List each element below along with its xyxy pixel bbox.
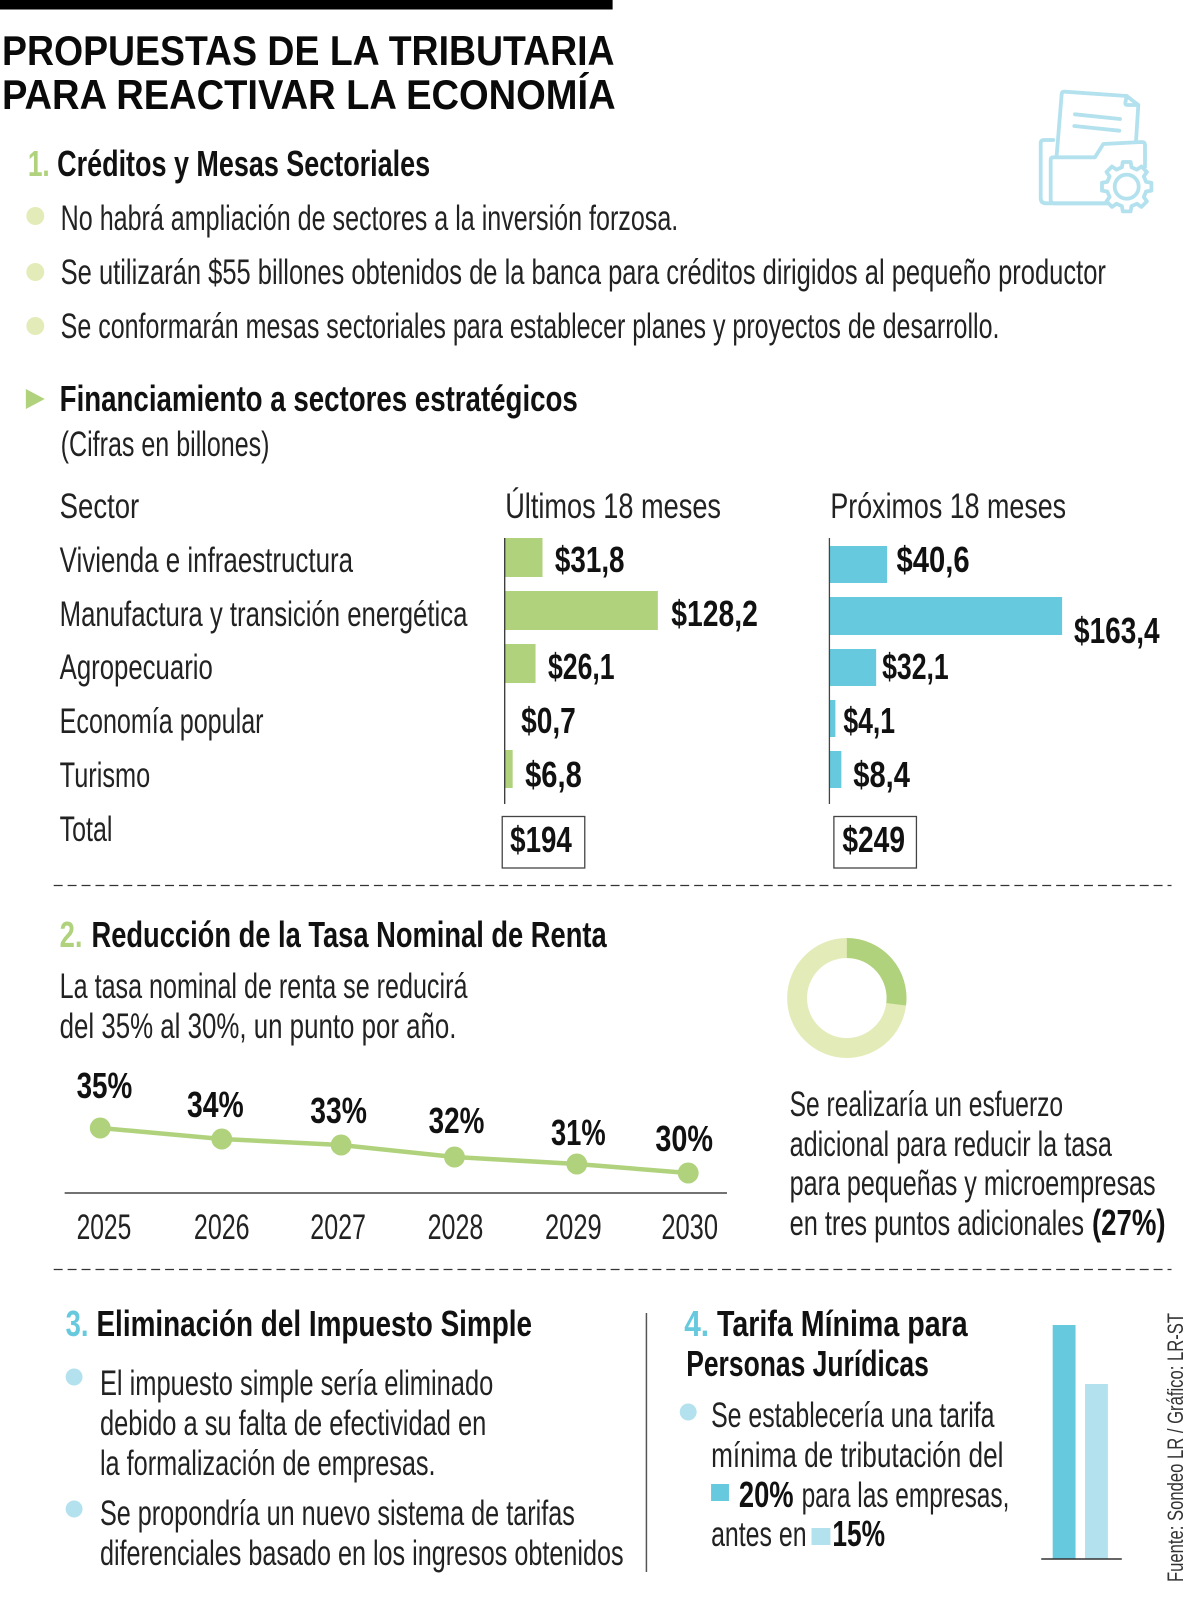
total box: próximos bbox=[834, 816, 916, 868]
values: próximos 18 meses: $32,1 bbox=[882, 647, 949, 687]
bullet text: section 4 bbox=[680, 1396, 1009, 1554]
total box: próximos: $249 bbox=[842, 820, 905, 860]
heading: section 3: Eliminación del Impuesto Simple bbox=[96, 1304, 532, 1344]
values: próximos 18 meses: $8,4 bbox=[853, 755, 910, 795]
title: PARA REACTIVAR LA ECONOMÍA bbox=[2, 71, 616, 118]
bar chart: strategic sector financing bbox=[60, 487, 1160, 868]
bullet list: section 3 bbox=[66, 1364, 624, 1573]
line chart: nominal rate 2025-2030: 32% bbox=[429, 1101, 484, 1141]
total box: últimos bbox=[502, 816, 585, 868]
values: próximos 18 meses: $163,4 bbox=[1074, 611, 1160, 651]
values: últimos 18 meses: $128,2 bbox=[671, 594, 758, 634]
total box: últimos: $194 bbox=[510, 820, 572, 860]
heading: section 4: 4. bbox=[684, 1304, 709, 1344]
line chart: nominal rate 2025-2030: 2026 bbox=[194, 1208, 250, 1247]
heading: section 4: Personas Jurídicas bbox=[686, 1344, 929, 1384]
heading: section 2: 2. bbox=[60, 915, 83, 955]
bullet list: section 3: diferenciales basado en los ingresos obtenidos bbox=[100, 1534, 624, 1573]
table headers: Próximos 18 meses bbox=[830, 487, 1066, 526]
bullet text: section 4: 20% bbox=[739, 1475, 794, 1515]
heading: section 4 bbox=[684, 1304, 968, 1384]
values: últimos 18 meses: $31,8 bbox=[555, 540, 625, 580]
sector labels: Total bbox=[60, 810, 112, 849]
line chart: nominal rate 2025-2030: 31% bbox=[551, 1113, 606, 1153]
table headers bbox=[60, 487, 1066, 526]
sector labels bbox=[60, 541, 468, 849]
series: próximos 18 meses bars bbox=[829, 538, 1062, 804]
heading: section 1: Créditos y Mesas Sectoriales bbox=[57, 144, 430, 184]
subheading: financing: (Cifras en billones) bbox=[61, 425, 270, 464]
bullet text: section 4: 15% bbox=[832, 1514, 885, 1554]
icon: section arrow bbox=[26, 389, 45, 409]
icon: folder with document and gear bbox=[1041, 92, 1151, 211]
bullet list: section 3: El impuesto simple sería eliminado bbox=[100, 1364, 493, 1403]
sector labels: Economía popular bbox=[60, 702, 264, 741]
text block: section 2 description: del 35% al 30%, un punto por año. bbox=[60, 1007, 456, 1046]
heading: section 1: 1. bbox=[28, 144, 50, 184]
text block: small business rate: en tres puntos adicionales bbox=[790, 1204, 1084, 1243]
values: últimos 18 meses: $6,8 bbox=[525, 755, 582, 795]
donut chart: 27% bbox=[797, 938, 906, 1048]
series: últimos 18 meses bars bbox=[505, 538, 658, 804]
source note: Fuente: Sondeo LR / Gráfico: LR-ST bbox=[1163, 1313, 1188, 1582]
line chart: nominal rate 2025-2030: 34% bbox=[187, 1085, 244, 1125]
values: próximos 18 meses: $4,1 bbox=[843, 701, 895, 741]
bar chart: minimum rate 20% vs 15% bbox=[1041, 1325, 1122, 1559]
line chart: nominal rate 2025-2030: 2029 bbox=[545, 1208, 602, 1247]
line chart: nominal rate 2025-2030: 2028 bbox=[428, 1208, 483, 1247]
subheading: financing bbox=[60, 379, 578, 464]
bullet list: section 1 bbox=[26, 199, 1106, 346]
line chart: nominal rate 2025-2030: 2030 bbox=[661, 1208, 718, 1247]
values: últimos 18 meses: $0,7 bbox=[521, 701, 576, 741]
line chart: nominal rate 2025-2030: 2027 bbox=[310, 1208, 366, 1247]
title bbox=[2, 27, 616, 118]
text block: section 2 description: La tasa nominal de renta se reducirá bbox=[60, 967, 468, 1006]
title: PROPUESTAS DE LA TRIBUTARIA bbox=[2, 27, 615, 74]
line chart: nominal rate 2025-2030: 35% bbox=[77, 1066, 132, 1106]
bullet list: section 3: la formalización de empresas. bbox=[100, 1444, 436, 1483]
table headers: Últimos 18 meses bbox=[505, 487, 721, 526]
sector labels: Agropecuario bbox=[60, 648, 213, 687]
heading: section 3: 3. bbox=[66, 1304, 89, 1344]
values: últimos 18 meses: $26,1 bbox=[548, 647, 615, 687]
line chart: nominal rate 2025-2030: 33% bbox=[310, 1091, 367, 1131]
heading: section 4: Tarifa Mínima para bbox=[717, 1304, 968, 1344]
bullet list: section 3: Se propondría un nuevo sistema de tarifas bbox=[100, 1494, 575, 1533]
line chart: nominal rate 2025-2030: 2025 bbox=[77, 1208, 131, 1247]
bullet text: section 4: mínima de tributación del bbox=[711, 1436, 1003, 1475]
top black bar bbox=[0, 0, 613, 10]
bullet text: section 4: Se establecería una tarifa bbox=[711, 1396, 995, 1435]
bullet text: section 4: antes en bbox=[711, 1515, 807, 1554]
values: últimos 18 meses bbox=[521, 540, 758, 795]
heading: section 2: Reducción de la Tasa Nominal de Renta bbox=[91, 915, 607, 955]
sector labels: Vivienda e infraestructura bbox=[60, 541, 353, 580]
sector labels: Manufactura y transición energética bbox=[60, 595, 468, 634]
text block: section 2 description bbox=[60, 967, 468, 1046]
text block: small business rate bbox=[790, 1085, 1166, 1243]
line chart: nominal rate 2025-2030: 30% bbox=[655, 1119, 713, 1159]
bullet list: section 1: No habrá ampliación de sectores a la inversión forzosa. bbox=[61, 199, 678, 238]
table headers: Sector bbox=[60, 487, 140, 526]
subheading: financing: Financiamiento a sectores estratégicos bbox=[60, 379, 578, 419]
bullet text: section 4: para las empresas, bbox=[802, 1476, 1009, 1515]
sector labels: Turismo bbox=[60, 756, 150, 795]
line chart: nominal rate 2025-2030 bbox=[65, 1066, 727, 1247]
text block: small business rate: (27%) bbox=[1092, 1203, 1166, 1243]
bullet list: section 3: debido a su falta de efectividad en bbox=[100, 1404, 486, 1443]
text block: small business rate: Se realizaría un esfuerzo bbox=[790, 1085, 1063, 1124]
values: próximos 18 meses bbox=[843, 540, 1160, 795]
values: próximos 18 meses: $40,6 bbox=[897, 540, 970, 580]
